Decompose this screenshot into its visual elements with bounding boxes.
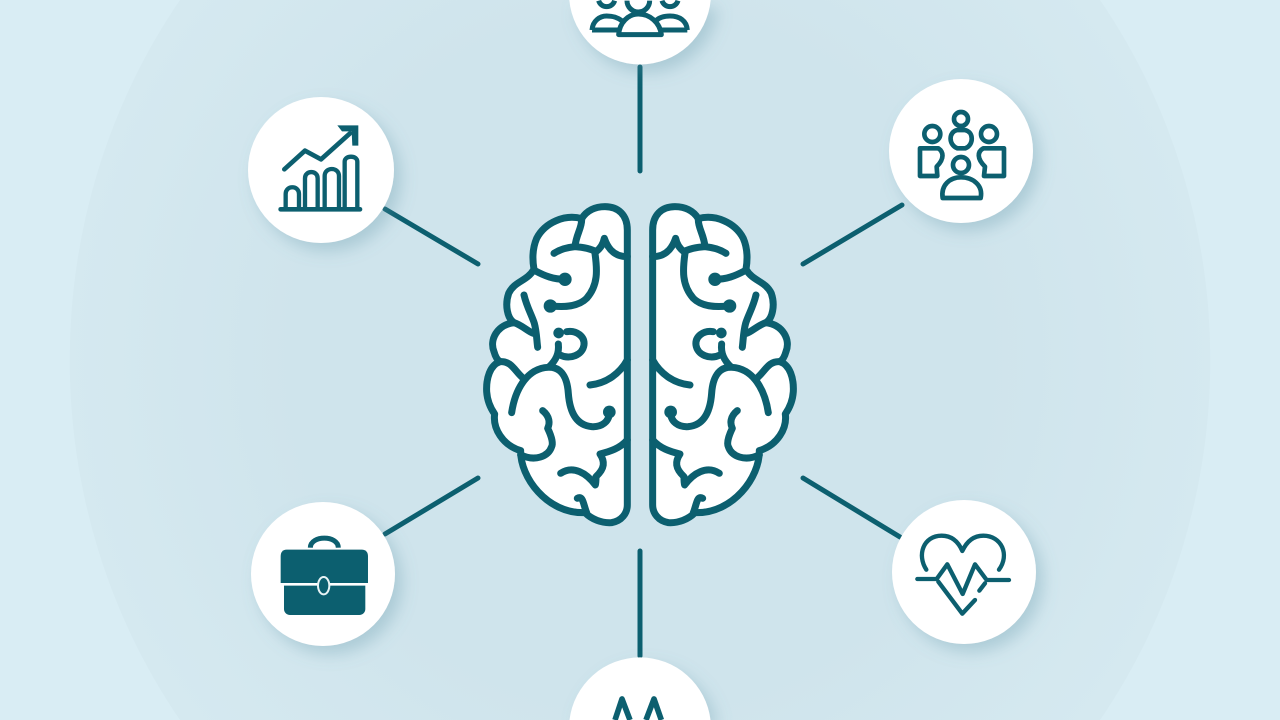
node: community	[889, 79, 1033, 223]
icon: four people	[920, 112, 1004, 198]
brain	[487, 207, 793, 523]
icon: rising bar chart with arrow	[281, 125, 360, 209]
icon: twin peaks pulse	[615, 699, 661, 720]
node: briefcase	[251, 502, 395, 646]
icon: group of three people	[592, 1, 687, 35]
node: growth chart	[248, 97, 394, 243]
connector lines	[385, 67, 902, 656]
left hemisphere	[487, 207, 627, 523]
icon: heart with pulse	[917, 536, 1009, 614]
node: team at top	[569, 0, 711, 64]
icon: briefcase	[281, 538, 368, 615]
right hemisphere	[653, 207, 793, 523]
node: heart health	[892, 500, 1036, 644]
node: bottom	[570, 657, 710, 720]
